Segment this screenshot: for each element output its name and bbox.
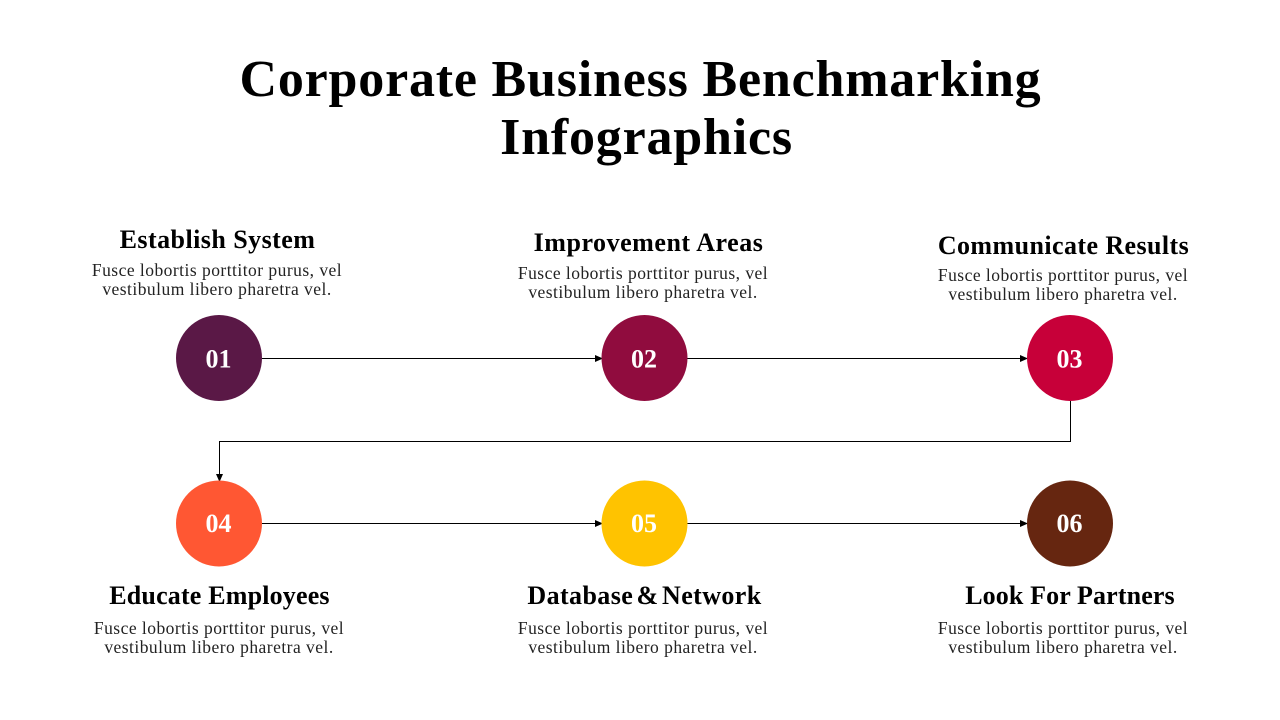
arrow: 02 to 03 bbox=[687, 355, 1028, 362]
heading: Database & Network: Database & Network bbox=[527, 581, 762, 610]
text: step 3 description: Fusce lobortis porttitor purus, vel bbox=[938, 265, 1188, 285]
arrow: 03 to 04 bbox=[216, 401, 1070, 482]
text: step 2 description bbox=[518, 263, 768, 302]
text: step 3 description: vestibulum libero pharetra vel. bbox=[948, 284, 1178, 304]
circle 01 bbox=[176, 315, 262, 401]
text: step 4 description: vestibulum libero pharetra vel. bbox=[104, 637, 334, 657]
heading: Improvement Areas: Improvement Areas bbox=[534, 228, 763, 257]
text: step 3 description bbox=[938, 265, 1188, 304]
title: Corporate Business Benchmarking bbox=[240, 51, 1041, 108]
circle 02 bbox=[602, 315, 688, 401]
text: step 5 description: Fusce lobortis porttitor purus, vel bbox=[518, 618, 768, 638]
circle 06 bbox=[1027, 480, 1113, 566]
circle 02: 02 bbox=[631, 344, 657, 374]
title: Infographics bbox=[500, 109, 793, 166]
circle 06: 06 bbox=[1056, 509, 1082, 538]
arrow: 05 to 06 bbox=[687, 520, 1028, 527]
arrow: 01 to 02 bbox=[262, 355, 603, 362]
text: step 4 description bbox=[94, 618, 344, 657]
text: step 6 description bbox=[938, 618, 1188, 657]
text: step 1 description: vestibulum libero pharetra vel. bbox=[102, 279, 332, 299]
circle 04 bbox=[176, 480, 262, 566]
heading: Educate Employees: Educate Employees bbox=[109, 581, 330, 610]
text: step 6 description: vestibulum libero pharetra vel. bbox=[948, 637, 1178, 657]
text: step 2 description: vestibulum libero pharetra vel. bbox=[528, 282, 758, 302]
circle 03 bbox=[1027, 315, 1113, 401]
text: step 2 description: Fusce lobortis porttitor purus, vel bbox=[518, 263, 768, 283]
arrow: 04 to 05 bbox=[262, 520, 603, 527]
circle 03: 03 bbox=[1056, 344, 1082, 374]
title bbox=[240, 51, 1041, 166]
text: step 1 description: Fusce lobortis porttitor purus, vel bbox=[92, 260, 342, 280]
text: step 5 description bbox=[518, 618, 768, 657]
circle 05 bbox=[602, 480, 688, 566]
heading: Look For Partners: Look For Partners bbox=[965, 581, 1175, 610]
circle 01: 01 bbox=[206, 344, 232, 374]
circle 04: 04 bbox=[206, 509, 232, 538]
circle 05: 05 bbox=[631, 509, 657, 538]
text: step 6 description: Fusce lobortis porttitor purus, vel bbox=[938, 618, 1188, 638]
text: step 4 description: Fusce lobortis porttitor purus, vel bbox=[94, 618, 344, 638]
text: step 1 description bbox=[92, 260, 342, 299]
text: step 5 description: vestibulum libero pharetra vel. bbox=[528, 637, 758, 657]
heading: Establish System: Establish System bbox=[120, 225, 315, 254]
heading: Communicate Results: Communicate Results bbox=[938, 231, 1189, 260]
